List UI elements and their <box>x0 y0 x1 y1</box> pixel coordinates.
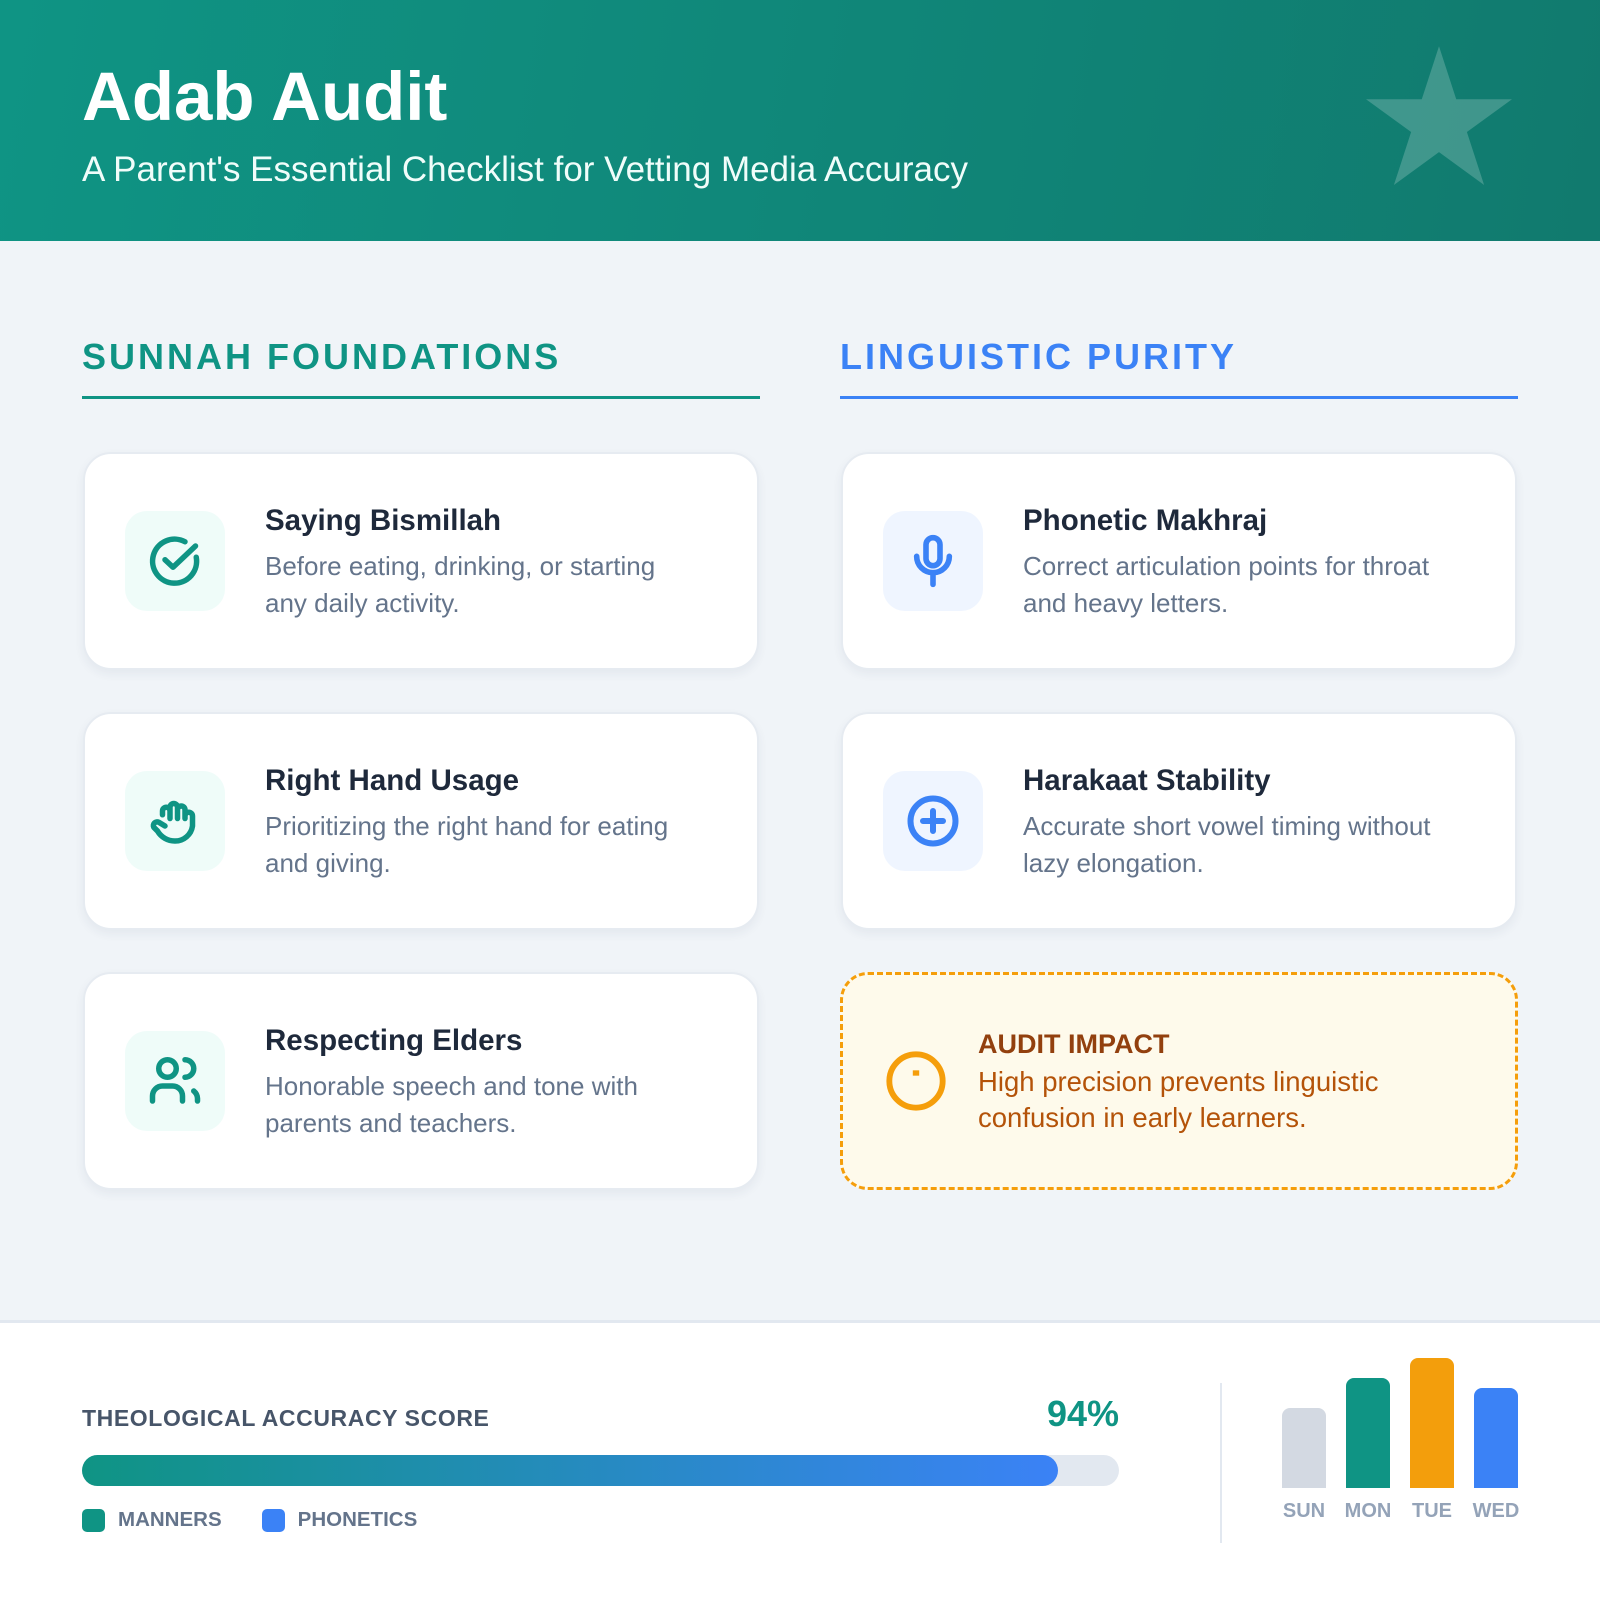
subtitle: A Parent's Essential Checklist for Vetting Media Accuracy <box>82 150 968 189</box>
heading: sunnah foundations: SUNNAH FOUNDATIONS <box>82 336 561 377</box>
card: right hand usage <box>83 712 759 930</box>
icon: plus circle <box>883 771 983 871</box>
bar chart: MON <box>1345 1500 1391 1522</box>
heading: sunnah foundations <box>82 336 760 399</box>
card: respecting elders: Honorable speech and tone with parents and teachers. <box>265 1071 638 1138</box>
divider <box>1220 1383 1222 1543</box>
heading: linguistic purity: LINGUISTIC PURITY <box>840 336 1237 377</box>
icon: alert circle <box>886 1051 946 1111</box>
card: right hand usage: Prioritizing the right hand for eating and giving. <box>265 811 668 878</box>
card: phonetic makhraj: Correct articulation points for throat and heavy letters. <box>1023 551 1429 618</box>
callout: audit impact <box>840 972 1518 1190</box>
progress bar <box>82 1455 1119 1486</box>
icon: star <box>1366 46 1512 185</box>
callout text: High precision prevents linguistic confusion in early learners. <box>978 1066 1378 1133</box>
card: saying bismillah: Saying Bismillah <box>265 504 501 537</box>
title: Adab Audit <box>82 58 447 135</box>
score value: 94% <box>1047 1393 1119 1434</box>
bar chart: TUE <box>1412 1500 1452 1522</box>
icon: people <box>125 1031 225 1131</box>
card: harakaat stability: Harakaat Stability <box>1023 764 1271 797</box>
header banner <box>0 0 1600 241</box>
bar chart <box>1282 1358 1519 1522</box>
card: harakaat stability: Accurate short vowel timing without lazy elongation. <box>1023 811 1431 878</box>
callout text <box>978 1029 1378 1133</box>
icon: hand <box>125 771 225 871</box>
legend: MANNERS PHONETICS <box>118 1508 417 1531</box>
icon: microphone <box>883 511 983 611</box>
score label: THEOLOGICAL ACCURACY SCORE <box>82 1405 489 1431</box>
card: harakaat stability <box>841 712 1517 930</box>
card: saying bismillah: Before eating, drinking, or starting any daily activity. <box>265 551 655 618</box>
icon: check <box>125 511 225 611</box>
callout text: AUDIT IMPACT <box>978 1029 1169 1059</box>
card: saying bismillah <box>83 452 759 670</box>
card: phonetic makhraj: Phonetic Makhraj <box>1023 504 1267 537</box>
card: respecting elders: Respecting Elders <box>265 1024 522 1057</box>
footer panel <box>0 1320 1600 1600</box>
heading: linguistic purity <box>840 336 1518 399</box>
card: right hand usage: Right Hand Usage <box>265 764 519 797</box>
card: respecting elders <box>83 972 759 1190</box>
bar chart: WED <box>1473 1500 1519 1522</box>
bar chart: SUN <box>1283 1500 1325 1522</box>
card: phonetic makhraj <box>841 452 1517 670</box>
